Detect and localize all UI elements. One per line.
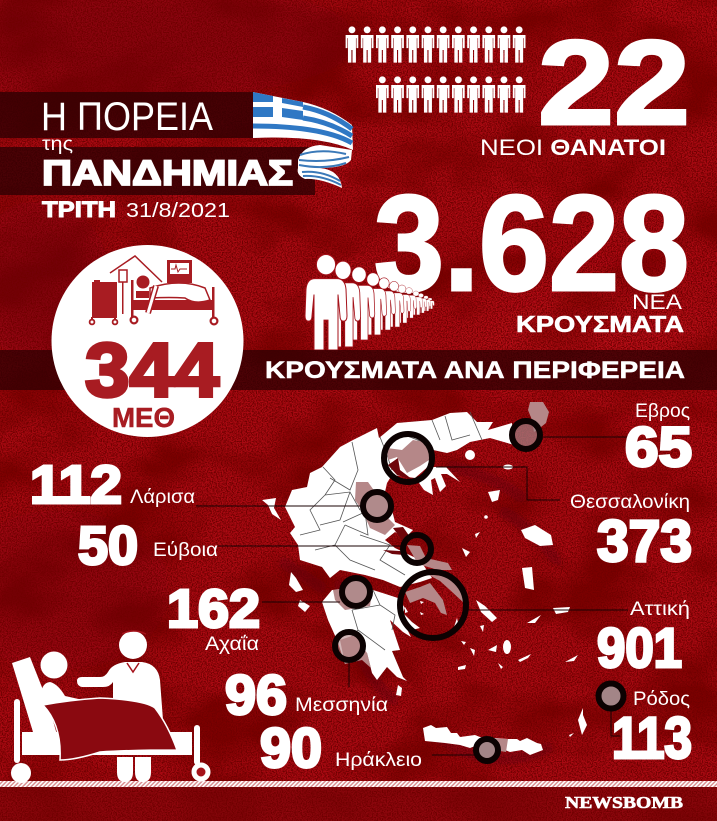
region label: Heraklion: 90 [260, 716, 322, 779]
region label: Larisa: Λάρισα [130, 487, 195, 508]
region label: Rhodes: 113 [612, 706, 692, 771]
regional borders [300, 412, 482, 650]
region label: Larisa: 112 [30, 455, 122, 515]
region label: Evros: 65 [625, 415, 692, 478]
deaths figure: 22 [538, 16, 690, 150]
peloponnese [322, 589, 420, 681]
mainland [285, 412, 514, 587]
aegean and ionian islands [262, 450, 587, 737]
regional cases band: ΚΡΟΥΣΜΑΤΑ ΑΝΑ ΠΕΡΙΦΕΡΕΙΑ [265, 357, 685, 384]
deaths figure: ΝΕΟΙ ΘΑΝΑΤΟΙ [480, 135, 666, 160]
icon: greek flag ribbon [253, 92, 353, 188]
title banner: 31/8/2021 [126, 200, 230, 222]
region label: Rhodes [612, 689, 692, 771]
highlighted regions [333, 402, 622, 752]
crete [423, 725, 543, 755]
deaths: pictogram of people [346, 26, 525, 113]
title banner [0, 92, 315, 222]
icon: ICU bed [90, 256, 217, 324]
region label: Evros: Εβρος [635, 401, 690, 422]
region label: Thessaloniki: Θεσσαλονίκη [570, 492, 690, 513]
title banner: ΤΡΙΤΗ [42, 197, 116, 222]
ICU panel [52, 245, 244, 437]
region label: Messinia: 96 [225, 663, 287, 726]
icon: queue of people [305, 254, 434, 350]
region label: Messinia [225, 663, 388, 726]
regional cases band [0, 350, 717, 390]
newsbomb logo: NEWSBOMB [565, 793, 683, 812]
marker rings [335, 421, 624, 761]
region label: Thessaloniki [570, 492, 692, 574]
region label: Messinia: Μεσσηνία [295, 695, 388, 716]
region label: Attica: Αττική [630, 599, 690, 620]
icu count: 344 [85, 328, 219, 413]
region label: Larisa [30, 455, 195, 515]
icu label: ΜΕΘ [112, 402, 175, 433]
region label: Achaia: 162 [167, 579, 260, 639]
new cases figure: ΝΕΑ [632, 291, 682, 314]
region label: Attica: 901 [597, 616, 682, 679]
icon: patient and doctor [11, 631, 208, 783]
region label: Achaia: Αχαΐα [205, 634, 259, 655]
new cases figure: ΚΡΟΥΣΜΑΤΑ [516, 311, 684, 337]
region label: Evia: Εύβοια [153, 540, 218, 561]
new cases figure: 3.628 [374, 167, 689, 319]
region label: Heraklion: Ηράκλειο [335, 750, 422, 771]
region label: Evia: 50 [78, 516, 138, 576]
region label: Heraklion [260, 716, 422, 779]
region label: Evia [78, 516, 218, 576]
chalkidiki [419, 467, 460, 495]
region label: Rhodes: Ρόδος [633, 689, 690, 710]
region label: Thessaloniki: 373 [597, 509, 692, 574]
map of Greece [196, 402, 632, 761]
title banner: Η ΠΟΡΕΙΑ [41, 95, 213, 139]
connector lines [196, 437, 632, 755]
gulfs in dark red [383, 458, 413, 555]
title banner: ΠΑΝΔΗΜΙΑΣ [42, 154, 293, 193]
title banner: της [42, 134, 73, 155]
deaths figure [480, 16, 690, 160]
